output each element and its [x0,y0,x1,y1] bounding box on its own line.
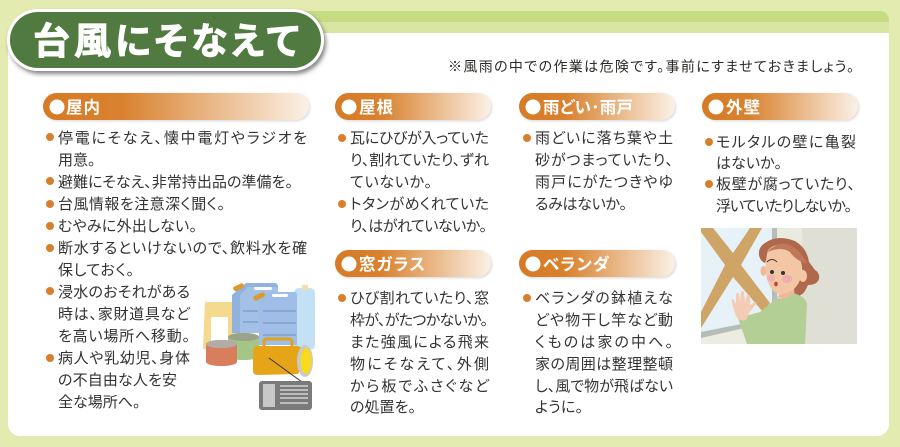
heading: 窓ガラス: 窓ガラス [359,255,425,274]
list: 窓ガラス items: の処置を。 [350,399,416,416]
header band light edge [300,22,889,33]
list: 外壁 items: はないか。 [716,155,782,172]
heading: 窓ガラス [335,250,491,277]
list: ベランダ items: くものは家の中へ。 [535,334,673,351]
list: 雨どい items: 雨戸にがたつきやゆ [535,174,673,191]
list: 雨どい items [523,130,673,213]
woman [732,238,819,344]
flashlight [253,339,313,382]
heading: 屋内 [43,93,309,120]
list: ベランダ items: どや物干し竿など動 [535,312,673,329]
heading: 屋根: 屋根 [359,98,394,117]
wall [701,228,857,344]
list: 屋内 items: 保しておく。 [58,262,134,279]
water tanks [232,283,315,350]
list: 屋内 items: 用意。 [58,152,96,169]
cans [206,333,259,366]
heading: ベランダ [519,250,675,277]
list: ベランダ items: し、風で物が飛ばない [535,378,673,395]
list: 窓ガラス items [338,290,490,416]
list: 屋根 items: 瓦にひびが入っていた [350,130,489,147]
heading: 屋内: 屋内 [66,98,100,117]
list: 屋内 items: を高い場所へ移動。 [58,328,190,345]
header band [300,11,889,32]
list: 雨どい items: るみはないか。 [535,196,627,213]
list: 屋内 items: 避難にそなえ、非常持出品の準備を。 [58,174,293,191]
heading: ベランダ: ベランダ [543,254,610,274]
panel: 屋根 [335,93,491,235]
list: 外壁 items: 板壁が腐っていたり、 [716,176,855,193]
list: 屋内 items: 断水するといけないので、飲料水を確 [58,240,307,257]
illustration: woman at taped window [701,228,857,344]
list: 窓ガラス items: から板でふさぐなど [350,378,490,395]
list: 屋内 items: 病人や乳幼児、身体 [58,350,190,367]
title [7,9,324,71]
list: 屋内 items: むやみに外出しない。 [58,218,197,235]
list: 屋内 items [46,130,307,411]
note text: ※風雨の中での作業は危険です。事前にすませておきましょう。 [448,58,854,74]
list: ベランダ items: ベランダの鉢植えな [535,290,673,307]
heading: 外壁 [702,93,858,120]
list: 窓ガラス items: 枠が、がたつかないか。 [350,312,488,329]
panel: ベランダ [519,250,675,416]
list: 屋内 items: 台風情報を注意深く聞く。 [58,196,225,213]
panel: 外壁 [701,93,858,344]
list: 屋内 items: 停電にそなえ、懐中電灯やラジオを [58,130,307,147]
list: ベランダ items: ように。 [535,399,583,416]
illustration: emergency supplies [203,283,315,410]
list: 屋内 items: 時は、家財道具など [58,306,191,323]
list: 屋根 items: ていないか。 [350,174,432,191]
list: 屋内 items: 浸水のおそれがある [58,284,190,301]
heading: 外壁: 外壁 [726,98,760,117]
list: 外壁 items: 浮いていたりしないか。 [716,198,852,215]
list: 雨どい items: 砂がつまっていたり、 [535,152,673,169]
list: 屋根 items: り、はがれていないか。 [350,218,487,235]
list: 窓ガラス items: また強風による飛来 [350,334,489,351]
panel: 屋内 [43,93,315,411]
list: 雨どい items: 雨どいに落ち葉や土 [535,130,673,147]
list: 外壁 items: モルタルの壁に亀裂 [716,134,856,151]
list: 屋根 items: り、割れていたり、ずれ [350,152,489,169]
heading: 雨どい・雨戸: 雨どい･雨戸 [543,98,633,117]
list: 外壁 items [705,134,856,215]
list: 屋根 items: トタンがめくれていた [350,196,489,213]
list: 屋根 items [338,130,489,235]
radio [259,381,312,410]
list: 窓ガラス items: 物にそなえて、外側 [350,356,489,373]
window with tape [701,228,777,338]
food bag [203,302,240,349]
list: 屋内 items: 全な場所へ。 [58,394,140,411]
heading: 雨どい・雨戸 [519,93,675,120]
list: ベランダ items [523,290,673,416]
title: 台風にそなえて [33,21,299,62]
panel: 窓ガラス [335,250,491,416]
list: ベランダ items: 家の周囲は整理整頓 [535,356,673,373]
panel: 雨どい・雨戸 [519,93,675,213]
heading: 屋根 [335,93,491,120]
list: 窓ガラス items: ひび割れていたり、窓 [350,290,489,307]
list: 屋内 items: の不自由な人を安 [58,372,177,389]
